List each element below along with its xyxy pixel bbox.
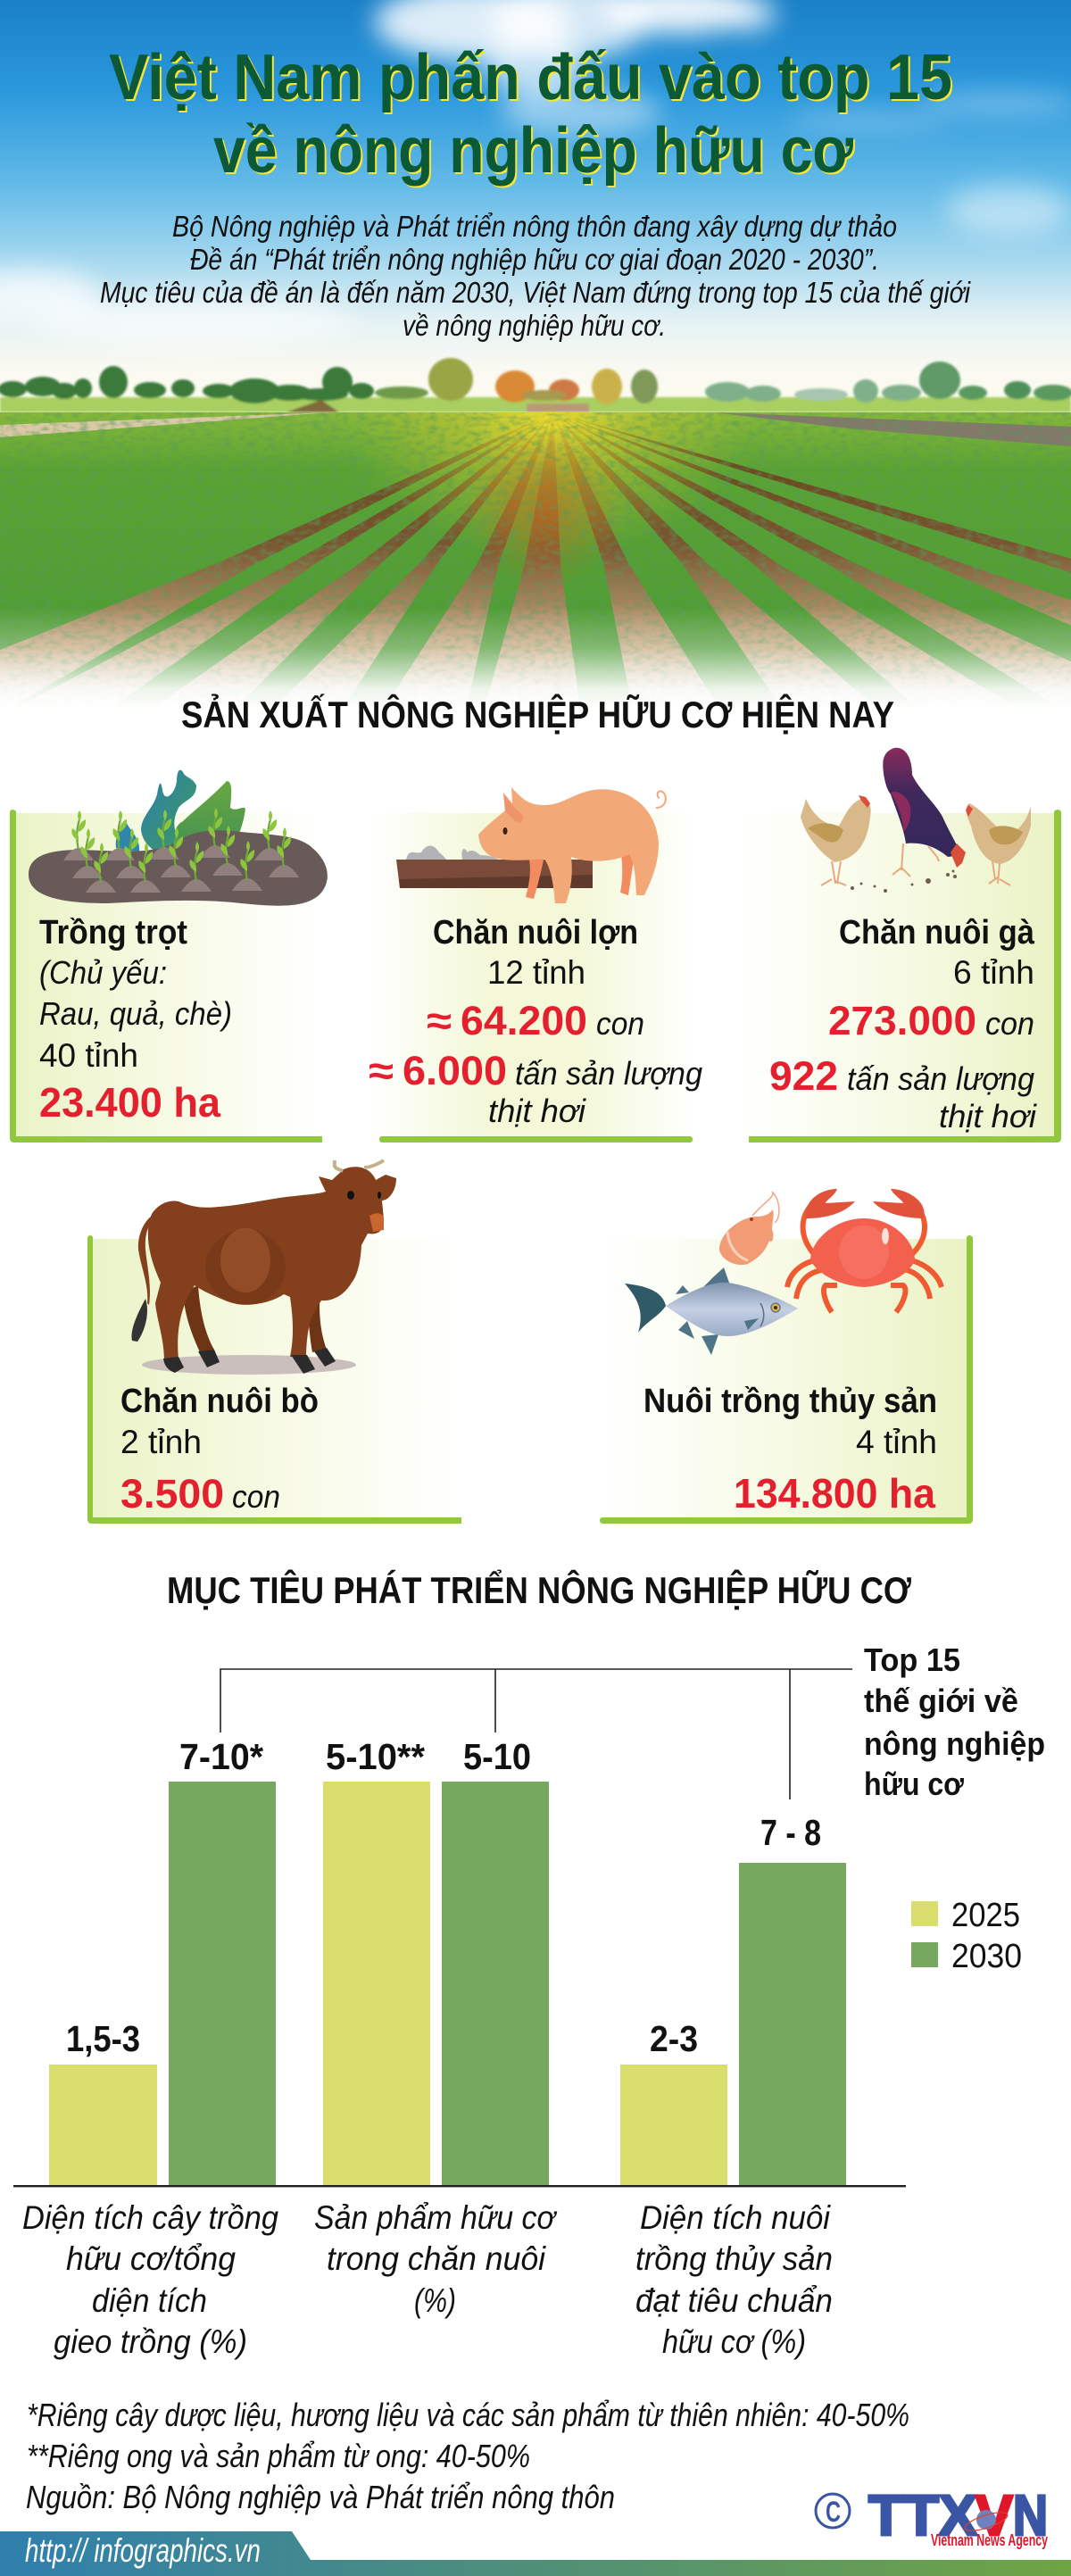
panel: pig farming: 64.200 (461, 998, 587, 1043)
panel: chicken farming: 922 (769, 1053, 838, 1099)
category label: aquaculture area: Diện tích nuôi (640, 2199, 832, 2236)
panel: crops: (Chủ yếu: (39, 954, 167, 991)
category label: livestock products: trong chăn nuôi (327, 2240, 547, 2277)
bars (49, 1782, 846, 2186)
panel: pig farming: 12 tỉnh (487, 954, 585, 991)
bar chart: organic targets (13, 1669, 906, 2187)
title: về nông nghiệp hữu cơ (213, 115, 854, 187)
panel: cattle farming: 3.500 (120, 1471, 224, 1517)
category label: crop area: Diện tích cây trồng (22, 2199, 278, 2236)
panel: crops (10, 770, 328, 1143)
icon: pig at a trough (396, 787, 666, 903)
category label: aquaculture area: đạt tiêu chuẩn (635, 2282, 833, 2319)
logo: TTXVN: V (976, 2483, 1013, 2547)
panel: pig farming: ≈ (369, 1048, 394, 1093)
panel: chicken farming: 6 tỉnh (953, 954, 1034, 991)
bar value labels: 7 - 8 (760, 1812, 821, 1853)
panel: cattle farming: Chăn nuôi bò (120, 1383, 319, 1420)
callout: Top 15: nông nghiệp (864, 1725, 1045, 1762)
bar value labels: 5-10 (463, 1736, 531, 1777)
title: về nông nghiệp hữu cơ (215, 117, 856, 188)
axis line (13, 2185, 906, 2187)
panel: aquaculture: 134.800 ha (734, 1470, 935, 1517)
callout: Top 15 (864, 1641, 1045, 1802)
legend (911, 1897, 1022, 1975)
bar value labels: 1,5-3 (66, 2018, 140, 2059)
panel: chicken farming: 273.000 (828, 998, 976, 1043)
category label: crop area (22, 2199, 278, 2360)
intro paragraph (100, 210, 971, 342)
category label: livestock products: Sản phẩm hữu cơ (314, 2199, 557, 2236)
panel: pig farming (369, 787, 702, 1143)
bracket connecting 2030 bars to Top 15 (220, 1669, 852, 1799)
logo: TTXVN: N (1013, 2483, 1048, 2547)
panel: chicken farming: Chăn nuôi gà (839, 914, 1035, 951)
footer band with website (0, 2531, 1071, 2576)
title: Việt Nam phấn đấu vào top 15 (111, 44, 954, 115)
panel: aquaculture: 4 tỉnh (856, 1424, 937, 1460)
bar value labels: 7-10* (179, 1736, 263, 1777)
panel: aquaculture (600, 1189, 973, 1524)
bar value labels: 2-3 (650, 2018, 698, 2059)
crop rows converging on the horizon (0, 412, 1071, 714)
callout: Top 15: hữu cơ (864, 1766, 964, 1802)
panel: pig farming: 6.000 (403, 1048, 507, 1093)
icon: cow (131, 1160, 396, 1375)
panel: chicken farming: thịt hơi (939, 1098, 1037, 1134)
tree line on the horizon (0, 358, 1071, 412)
panel: cattle farming: 2 tỉnh (120, 1424, 202, 1460)
bar value labels (66, 1736, 821, 2059)
title (109, 42, 954, 188)
panel: pig farming: ≈ (427, 998, 452, 1043)
legend: 2025 (951, 1897, 1020, 1934)
footnotes and source: *Riêng cây dược liệu, hương liệu và các sản phẩm từ thiên nhiên: 40-50% (27, 2397, 909, 2433)
footnotes and source: **Riêng ong và sản phẩm từ ong: 40-50% (27, 2438, 530, 2474)
panel: cattle farming: con (232, 1478, 280, 1515)
category label: crop area: gieo trồng (%) (54, 2323, 247, 2360)
heading: development targets: MỤC TIÊU PHÁT TRIỂN NÔNG NGHIỆP HỮU CƠ (167, 1568, 911, 1611)
footnotes and source: Nguồn: Bộ Nông nghiệp và Phát triển nông thôn (26, 2479, 615, 2515)
category label: aquaculture area: hữu cơ (%) (662, 2323, 806, 2360)
panel: pig farming: thịt hơi (488, 1093, 586, 1129)
category label: crop area: hữu cơ/tổng (66, 2240, 236, 2277)
intro paragraph: về nông nghiệp hữu cơ. (403, 309, 666, 342)
panel: crops: Trồng trọt (39, 914, 187, 951)
icon: soil bed with sprouts (29, 770, 328, 906)
category label: aquaculture area: trồng thủy sản (635, 2240, 833, 2277)
category label: crop area: diện tích (92, 2282, 207, 2319)
panel: aquaculture: Nuôi trồng thủy sản (643, 1383, 937, 1420)
panel: pig farming: Chăn nuôi lợn (433, 914, 638, 951)
panel: pig farming: con (596, 1005, 644, 1042)
intro paragraph: Đề án “Phát triển nông nghiệp hữu cơ giai đoạn 2020 - 2030”. (190, 243, 879, 276)
legend: 2030 (951, 1938, 1022, 1975)
category label: livestock products (314, 2199, 557, 2319)
logo: TTXVN: TTX (868, 2483, 977, 2547)
icon: hens and rooster (801, 748, 1031, 893)
icon: crab, shrimp and fish (625, 1189, 942, 1355)
panel: chicken farming: tấn sản lượng (847, 1060, 1034, 1097)
footnotes and source (26, 2397, 909, 2515)
intro paragraph: Bộ Nông nghiệp và Phát triển nông thôn đang xây dựng dự thảo (172, 210, 897, 243)
callout: Top 15: Top 15 (864, 1641, 960, 1678)
panel: crops: Rau, quả, chè) (39, 995, 232, 1032)
category label: livestock products: (%) (414, 2282, 456, 2319)
panel: chicken farming (739, 748, 1061, 1143)
footer band with website: http:// infographics.vn (25, 2532, 261, 2569)
panel: crops: 23.400 ha (39, 1079, 220, 1126)
bar value labels: 5-10** (326, 1736, 425, 1777)
panel: cattle farming (87, 1160, 461, 1524)
panel: pig farming: tấn sản lượng (515, 1055, 702, 1092)
logo: TTXVN (816, 2483, 1048, 2549)
logo: TTXVN: C (826, 2496, 841, 2528)
panel: chicken farming: con (985, 1005, 1034, 1042)
heading: current production: SẢN XUẤT NÔNG NGHIỆP HỮU CƠ HIỆN NAY (181, 693, 894, 735)
panel: crops: 40 tỉnh (39, 1037, 138, 1074)
category label: aquaculture area (635, 2199, 833, 2360)
callout: Top 15: thế giới về (864, 1683, 1018, 1719)
title: Việt Nam phấn đấu vào top 15 (109, 42, 952, 113)
hero photo: sky and farmland (0, 0, 1071, 714)
